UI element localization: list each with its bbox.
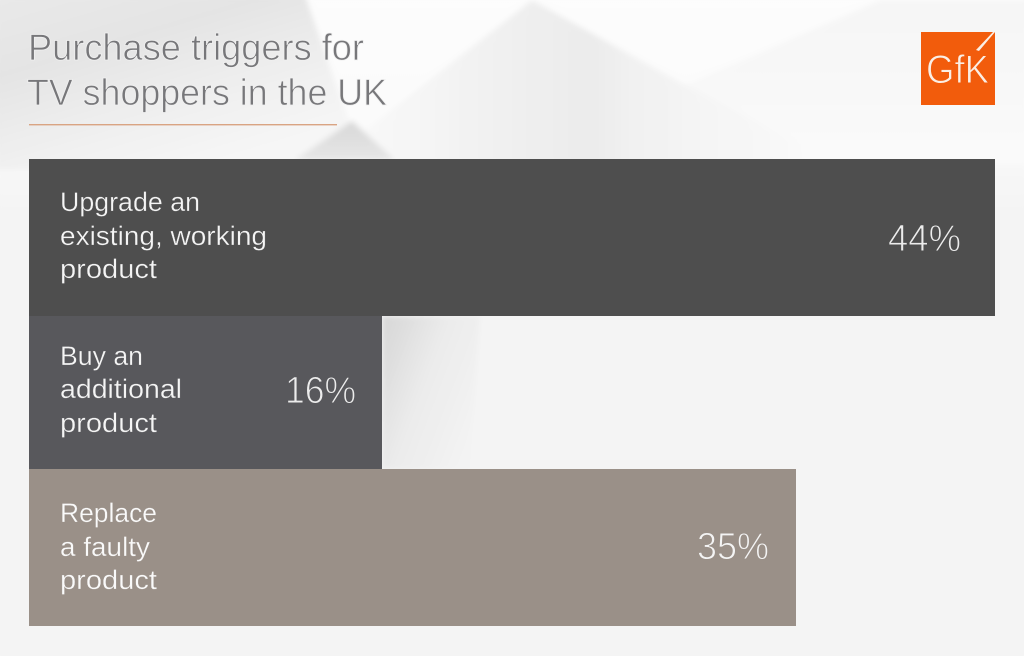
- label: replace: [60, 498, 158, 595]
- bar: additional 16%: [29, 316, 382, 469]
- label: upgrade: Upgrade an: [60, 187, 200, 217]
- bar: replace 35%: [29, 469, 796, 626]
- value: 16%: 16%: [285, 370, 356, 412]
- label: additional: product: [60, 408, 158, 438]
- value: 44%: 44%: [888, 218, 961, 260]
- title: TV shoppers in the UK: [27, 72, 387, 113]
- title underline: [29, 124, 337, 125]
- label: upgrade: [60, 187, 267, 284]
- label: replace: product: [60, 565, 158, 595]
- bar: upgrade 44%: [29, 159, 995, 316]
- label: upgrade: existing, working: [60, 221, 267, 251]
- title: [27, 27, 387, 113]
- label: additional: additional: [60, 374, 182, 404]
- label: additional: [60, 341, 182, 438]
- title: Purchase triggers for: [28, 27, 364, 68]
- label: upgrade: product: [60, 254, 158, 284]
- logo: GfK: GfK: [926, 48, 989, 92]
- logo: GfK: [921, 32, 995, 105]
- label: additional: Buy an: [60, 341, 143, 371]
- value: 35%: 35%: [697, 526, 769, 568]
- label: replace: a faulty: [60, 532, 151, 562]
- label: replace: Replace: [60, 498, 157, 528]
